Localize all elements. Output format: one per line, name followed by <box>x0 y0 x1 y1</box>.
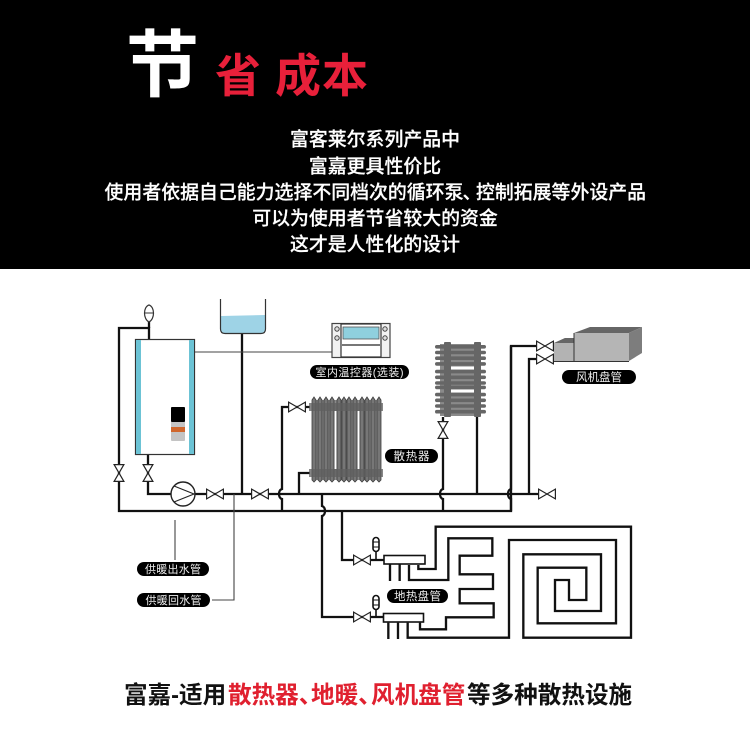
manifolds <box>373 538 425 622</box>
text block: intro: 富嘉更具性价比 <box>309 156 441 178</box>
footer caption: 地暖、 <box>311 682 382 709</box>
footer caption: 风机盘管 <box>371 682 465 709</box>
pump <box>171 482 195 506</box>
floor heating coil <box>388 527 631 639</box>
icon: expansion vessel top <box>144 305 154 322</box>
text block: intro: 富客莱尔系列产品中 <box>290 128 460 150</box>
text block: intro: 控制拓展等外设产品 <box>476 182 646 204</box>
label: fan coil: 风机盘管 <box>576 370 622 384</box>
footer caption: 散热器、 <box>228 682 322 709</box>
boiler <box>136 340 194 454</box>
label: supply pipe <box>137 562 209 576</box>
text block: intro: 可以为使用者节省较大的资金 <box>252 208 498 230</box>
label: radiator: 散热器 <box>394 449 430 463</box>
label: return pipe <box>137 593 210 607</box>
footer caption <box>124 681 633 709</box>
title: 省成本 <box>215 50 368 102</box>
towel radiator <box>435 342 486 417</box>
thin leader lines <box>175 352 332 600</box>
label: return pipe: 供暖回水管 <box>146 593 202 607</box>
text block: intro: 使用者依据自己能力选择不同档次的循环泵 <box>105 182 464 204</box>
label: supply pipe: 供暖出水管 <box>145 562 201 576</box>
water tank <box>220 299 266 334</box>
label: floor coil <box>387 589 448 603</box>
label: floor coil: 地热盘管 <box>394 589 441 603</box>
title: 节 <box>126 26 199 106</box>
text block: intro: 、 <box>463 182 481 204</box>
text block: intro: 这才是人性化的设计 <box>290 234 460 256</box>
label: fan coil <box>562 370 636 384</box>
label: thermostat: 室内温控器(选装) <box>316 365 404 379</box>
label: radiator <box>385 449 438 463</box>
footer caption: 富嘉-适用 <box>124 681 226 709</box>
text block: intro <box>105 128 646 256</box>
fan coil unit <box>554 327 642 362</box>
heating system diagram <box>114 299 642 639</box>
valves <box>114 341 555 622</box>
panel: black header <box>0 0 750 269</box>
footer caption: 等多种散热设施 <box>467 682 633 709</box>
pipework <box>119 320 556 617</box>
title <box>126 26 368 106</box>
room thermostat <box>332 324 390 358</box>
column radiator <box>309 397 383 482</box>
